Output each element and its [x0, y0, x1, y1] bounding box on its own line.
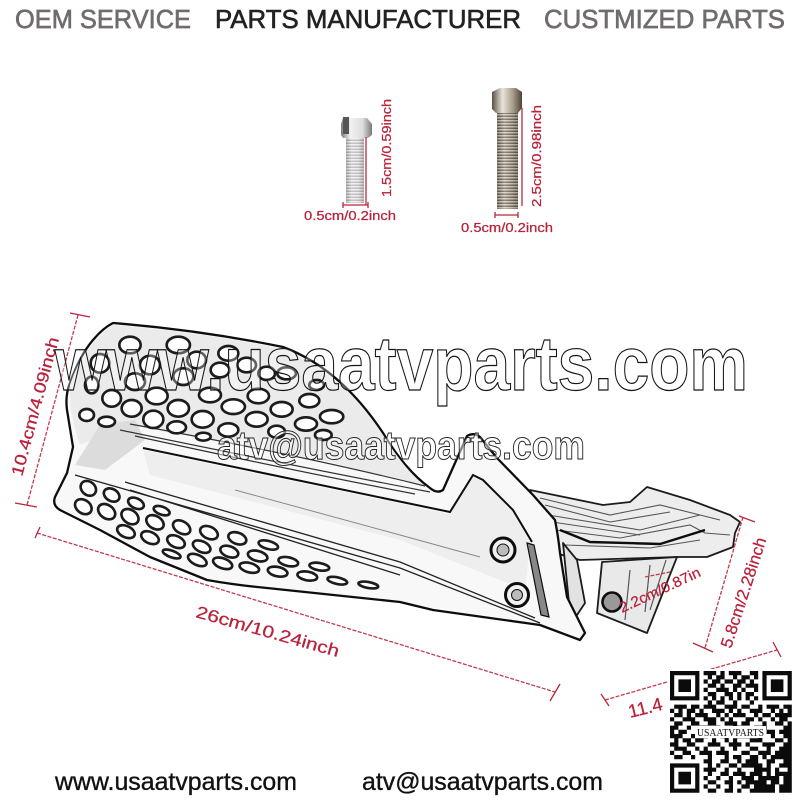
dimension: guard length	[35, 527, 560, 701]
heading: customized parts: CUSTMIZED PARTS	[544, 6, 785, 34]
label: 2.2cm/0.87in: 2.2cm/0.87in	[617, 565, 703, 617]
icon: long brass bolt	[492, 88, 522, 209]
header strip	[15, 6, 785, 34]
inner panel shading	[143, 450, 530, 590]
label: 26cm/10.24inch: 26cm/10.24inch	[194, 603, 342, 661]
clamp bolt	[602, 592, 622, 612]
long bolt with dimensions	[461, 88, 553, 235]
label: 11.4 partly hidden: 11.4	[626, 693, 665, 722]
email: atv@usaatvparts.com	[362, 769, 603, 796]
label: short bolt diameter: 0.5cm/0.2inch	[304, 209, 396, 223]
guard body	[54, 323, 585, 640]
inner edge lines	[143, 448, 532, 542]
upper hex vents	[79, 337, 343, 441]
dimension: long bolt length	[495, 108, 522, 218]
lower clamp	[597, 557, 677, 633]
dimension: clamp height	[693, 516, 755, 652]
dimension: bracket width	[601, 642, 781, 706]
label: 5.8cm/2.28inch: 5.8cm/2.28inch	[718, 535, 770, 650]
icon: short silver bolt	[341, 117, 372, 203]
label: 1.5cm/0.59inch: 1.5cm/0.59inch	[380, 99, 394, 197]
label: 2.5cm/0.98inch: 2.5cm/0.98inch	[530, 105, 544, 207]
mounting bracket arm	[530, 487, 740, 560]
lower hex vents	[72, 478, 379, 590]
hand guard drawing	[54, 323, 740, 640]
footer contacts	[54, 769, 603, 796]
heading: parts manufacturer: PARTS MANUFACTURER	[215, 6, 521, 34]
left fold highlight	[75, 420, 145, 470]
label: 10.4cm/4.09inch: 10.4cm/4.09inch	[8, 335, 63, 478]
dimension: short bolt length	[343, 137, 368, 208]
upper shield shading	[70, 325, 425, 486]
short bolt with dimensions	[304, 99, 396, 223]
QR code	[668, 669, 794, 794]
dimension: clamp inner width	[645, 572, 670, 577]
website: www.usaatvparts.com	[54, 769, 297, 796]
QR modules	[670, 673, 792, 791]
dimension: guard height	[15, 313, 90, 507]
QR logo text: USAATVPARTS	[697, 728, 764, 739]
mounting screws	[491, 538, 528, 606]
heading: OEM service: OEM SERVICE	[15, 6, 191, 34]
watermark: email: atv@usaatvparts.com	[217, 424, 585, 468]
dimensions on guard	[8, 313, 781, 722]
post	[563, 543, 585, 615]
label: long bolt diameter: 0.5cm/0.2inch	[461, 221, 553, 235]
